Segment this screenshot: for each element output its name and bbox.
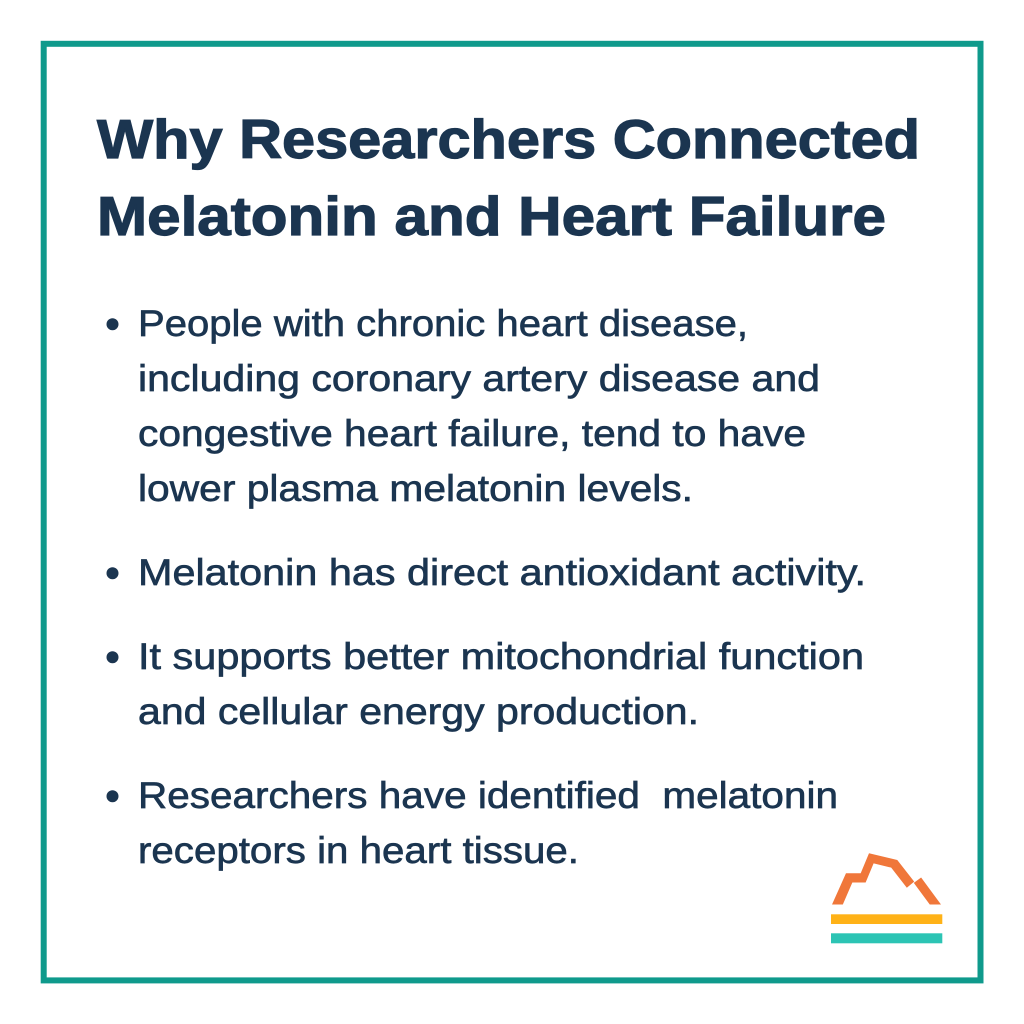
- title: [97, 108, 920, 247]
- title: Why Researchers Connected: [97, 108, 920, 170]
- bullet: melatonin receptors: Researchers have identified melatonin: [138, 775, 838, 816]
- bullet: plasma melatonin levels: including coronary artery disease and: [138, 358, 820, 399]
- title: Melatonin and Heart Failure: [97, 185, 886, 247]
- bullet: plasma melatonin levels: [106, 303, 820, 509]
- bullet: antioxidant activity: Melatonin has direct antioxidant activity.: [138, 552, 866, 593]
- icon: mountain logo: [831, 854, 942, 943]
- bullet: mitochondrial function: It supports better mitochondrial function: [138, 636, 864, 677]
- bullet: plasma melatonin levels: lower plasma melatonin levels.: [138, 468, 693, 509]
- bullet: melatonin receptors: [106, 775, 838, 871]
- bullet: mitochondrial function: and cellular energy production.: [138, 691, 699, 732]
- bullet: mitochondrial function: [106, 636, 864, 732]
- bullet: plasma melatonin levels: People with chronic heart disease,: [138, 303, 748, 344]
- bullet: melatonin receptors: receptors in heart tissue.: [138, 830, 579, 871]
- bullet: plasma melatonin levels: congestive heart failure, tend to have: [138, 413, 806, 454]
